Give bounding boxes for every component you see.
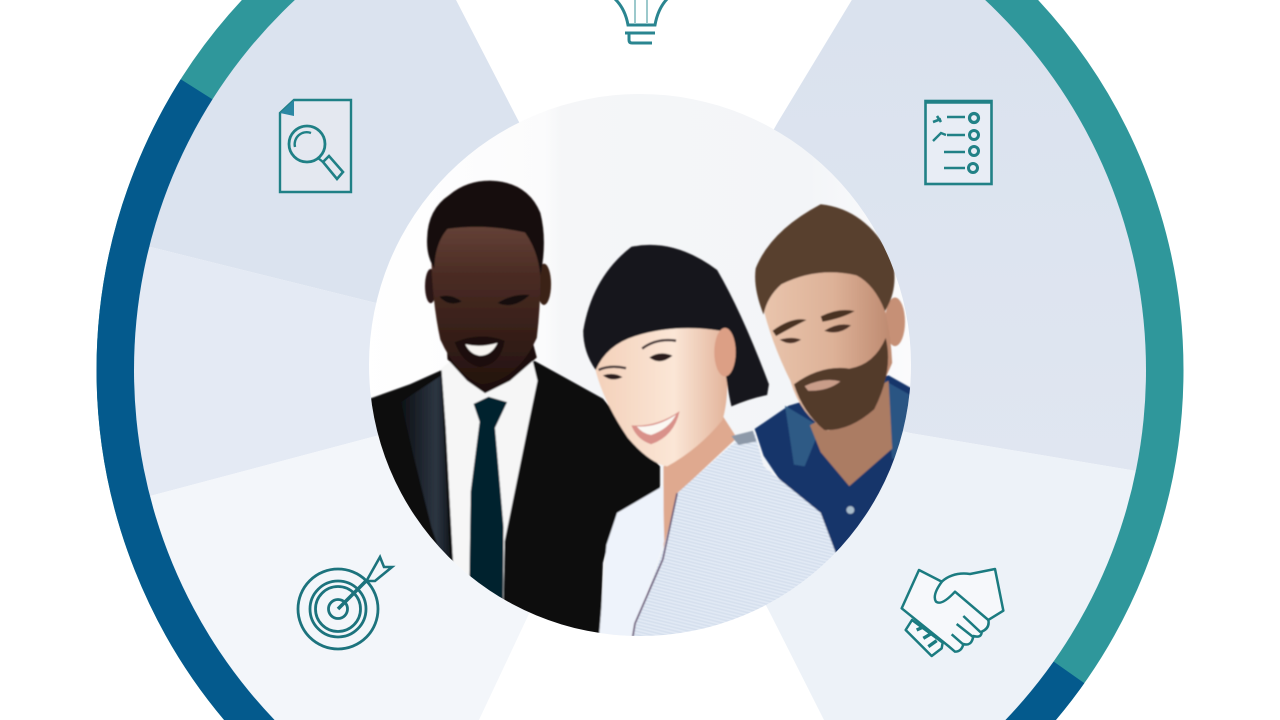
photo background: [369, 94, 911, 568]
wedge: top left: [149, 0, 519, 303]
handshake: thumb and finger lines: [935, 581, 988, 644]
wedge: bottom left: [150, 436, 529, 720]
central photo disc: [369, 94, 911, 636]
icon: target with arrow: [298, 557, 392, 649]
icon: checklist: [925, 101, 992, 184]
handshake: fingers behind: [906, 620, 943, 656]
person: smiling woman in light blouse: [582, 244, 836, 636]
icon: document with magnifier: [280, 100, 351, 192]
person: bearded man in denim shirt: [755, 204, 917, 574]
wedge: right: [774, 0, 1146, 471]
icon: light bulb: [614, 0, 668, 43]
wedge: left: [134, 246, 378, 496]
handshake: left hand and sleeve: [902, 569, 1003, 652]
ring arc: dark blue: [96, 79, 1084, 720]
wedge: bottom right: [766, 432, 1136, 720]
photo: three colleagues: [371, 180, 910, 636]
person: man in black suit: [371, 180, 662, 633]
icon: handshake: [902, 569, 1003, 656]
